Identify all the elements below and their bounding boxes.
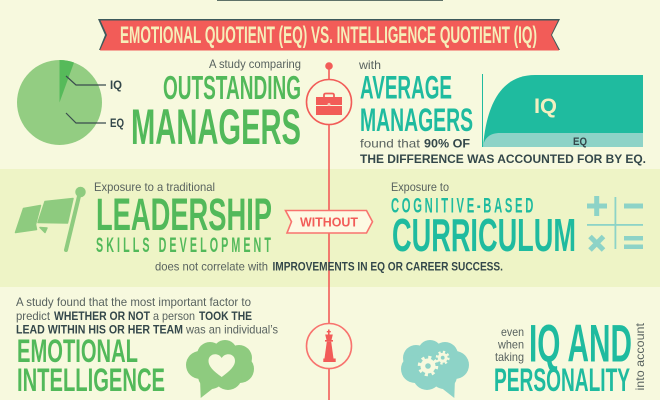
text: a study found: was an individual’s [185, 322, 278, 336]
text: average managers [358, 58, 646, 166]
text: a study found: TOOK THE [199, 309, 252, 323]
icon: speech bubble with heart [186, 340, 254, 398]
icon: brain with gears [401, 340, 469, 398]
text: average managers: found that [360, 136, 421, 150]
area chart: average managers: IQ [534, 95, 557, 118]
text: even when taking iq and personality into account: even [501, 325, 524, 339]
text: a study found: a person [153, 309, 195, 323]
text: leadership skills development: Exposure to a traditional [94, 180, 215, 194]
text: average managers: 90% OF [424, 136, 470, 150]
text: a study found [16, 295, 278, 336]
text: cognitive-based curriculum: COGNITIVE-BASED [391, 194, 536, 218]
pie chart: outstanding managers: EQ [110, 118, 124, 130]
callout: without: WITHOUT [300, 214, 358, 230]
text: cognitive-based curriculum: Exposure to [391, 180, 449, 194]
icon: flag [16, 188, 85, 250]
text: cognitive-based curriculum [391, 180, 576, 261]
text: a study comparing outstanding managers: MANAGERS [131, 99, 301, 155]
text: a study comparing outstanding managers [131, 57, 301, 155]
text: leadership skills development: SKILLS DEVELOPMENT [96, 234, 274, 257]
text: even when taking iq and personality into account [494, 314, 647, 398]
text: even when taking iq and personality into account: when [497, 338, 524, 352]
icon: math symbols [587, 196, 643, 250]
pie chart: outstanding managers [17, 60, 124, 145]
heading: emotional intelligence [17, 333, 165, 398]
title banner [98, 19, 560, 50]
text: a study comparing outstanding managers: OUTSTANDING [163, 69, 301, 106]
text: average managers: MANAGERS [360, 102, 473, 138]
area chart: average managers [482, 74, 643, 148]
text: a study comparing outstanding managers: A study comparing [209, 57, 301, 71]
text: a study found: LEAD WITHIN HIS OR HER TEAM [16, 322, 183, 336]
band: leadership section background [0, 169, 660, 287]
area chart: average managers: EQ [573, 136, 587, 148]
text: even when taking iq and personality into account: into account [633, 322, 647, 390]
text: does not correlate: IMPROVEMENTS IN EQ OR CAREER SUCCESS. [272, 260, 503, 274]
icon: chess king [306, 324, 352, 368]
text: a study found: WHETHER OR NOT [54, 309, 151, 323]
callout: without [286, 210, 372, 233]
text: average managers: THE DIFFERENCE WAS ACCOUNTED FOR BY EQ. [360, 152, 646, 166]
text: a study found: A study found that the most important factor to [16, 295, 251, 309]
heading: emotional intelligence: EMOTIONAL [17, 333, 138, 369]
text: even when taking iq and personality into account: taking [495, 350, 524, 364]
text: a study found: predict [16, 309, 51, 323]
heading: emotional intelligence: INTELLIGENCE [17, 362, 165, 398]
text: average managers: AVERAGE [360, 70, 452, 106]
center timeline [326, 63, 332, 400]
pie chart: outstanding managers: IQ [110, 80, 122, 92]
text: does not correlate: does not correlate with [155, 260, 268, 274]
text: does not correlate [155, 260, 503, 274]
text: leadership skills development [94, 180, 274, 257]
icon: briefcase [306, 80, 352, 124]
text: leadership skills development: LEADERSHIP [96, 189, 272, 240]
text: average managers: with [358, 58, 381, 72]
